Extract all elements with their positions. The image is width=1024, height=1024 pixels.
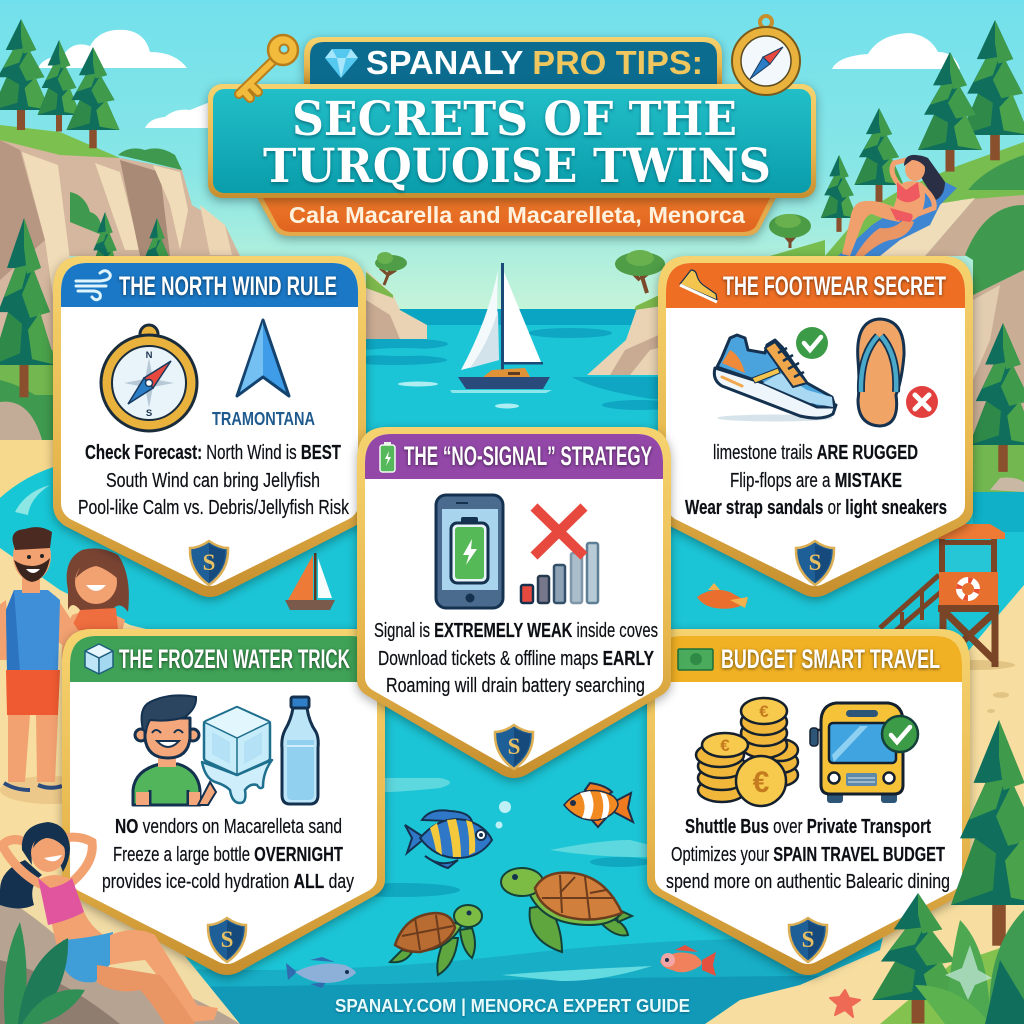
text block: Pool-like Calm vs. Debris/Jellyfish Risk <box>78 496 350 519</box>
icon: euro coins: € <box>759 702 769 721</box>
icon: wind <box>76 271 110 300</box>
right shore sand <box>705 585 1024 1024</box>
reclining woman on rock <box>0 822 240 1024</box>
lower left beach <box>0 880 240 1024</box>
text block: provides ice-cold hydration ALL day <box>102 870 355 893</box>
icon: water bottle <box>282 697 318 804</box>
text block <box>102 815 355 893</box>
fish: blue tropical <box>405 810 492 868</box>
lifeguard tower <box>880 524 1015 670</box>
text block: Check Forecast: North Wind is BEST <box>85 441 341 464</box>
left cliff and hill <box>0 125 240 540</box>
fish: grey <box>286 957 356 988</box>
fish: clownfish <box>564 783 633 827</box>
icon: battery <box>380 442 395 472</box>
icon: melting ice cube <box>202 707 272 803</box>
heading: THE NORTH WIND RULE <box>119 271 337 301</box>
icon: red cross <box>534 507 584 556</box>
text block <box>666 815 950 893</box>
icon: compass: S <box>146 408 152 419</box>
couple on the beach <box>0 527 129 804</box>
text block <box>78 441 350 519</box>
text block: Wear strap sandals or light sneakers <box>685 496 947 519</box>
heading: THE FROZEN WATER TRICK <box>119 644 350 674</box>
text block: Signal is EXTREMELY WEAK inside coves <box>374 619 658 642</box>
icon: shield <box>789 918 827 962</box>
background: sky <box>0 0 1024 310</box>
trees right <box>821 20 1024 472</box>
icon: compass: N <box>146 350 153 361</box>
icon: north arrow <box>237 320 289 396</box>
card: The Footwear Secret <box>658 256 973 597</box>
title line 2: TURQUOISE TWINS <box>263 139 771 194</box>
banner: orange subtitle <box>256 196 777 236</box>
rock and tree: right of sailboat <box>587 250 670 375</box>
card: The Frozen Water Trick <box>62 629 385 975</box>
icon: green check <box>882 716 918 752</box>
trees: bottom right <box>872 720 1024 1024</box>
icon: shield <box>495 725 533 769</box>
text block: Freeze a large bottle OVERNIGHT <box>113 843 343 866</box>
icon: shield <box>190 541 228 585</box>
text block: NO vendors on Macarelleta sand <box>115 815 342 838</box>
small sailboat <box>285 553 335 610</box>
icon: shuttle bus <box>810 703 903 803</box>
label: Tramontana: TRAMONTANA <box>212 409 315 429</box>
banner: main title <box>208 84 816 198</box>
card: Budget Smart Travel <box>647 629 970 975</box>
heading: Spanaly Pro Tips: SPANALY PRO TIPS: <box>366 44 703 81</box>
text block: limestone trails ARE RUGGED <box>713 441 918 464</box>
icon: smartphone <box>436 495 503 608</box>
icon: sneaker <box>714 335 836 422</box>
icon: key <box>239 35 298 98</box>
grass under round tree <box>770 240 825 256</box>
sand pebbles <box>987 692 1009 713</box>
icon: compass <box>101 325 197 431</box>
grass bottom right <box>880 940 1024 1024</box>
icon: shield <box>796 541 834 585</box>
cloud: left <box>38 30 215 128</box>
icon: shield <box>208 918 246 962</box>
text block: Flip-flops are a MISTAKE <box>730 469 902 492</box>
bubbles <box>496 801 511 828</box>
text block <box>374 619 658 697</box>
starfish <box>830 990 860 1017</box>
card: The No-Signal Strategy <box>357 427 671 778</box>
rock and tree: left of sailboat <box>366 252 427 339</box>
banner: top tab <box>304 37 722 86</box>
icon: red cross <box>906 386 938 418</box>
round tree by banner <box>769 214 811 248</box>
text block: spend more on authentic Balearic dining <box>666 870 950 893</box>
icon: euro coins: € <box>720 736 730 755</box>
cloud: right <box>832 33 960 69</box>
icon: smiling man <box>133 695 216 805</box>
heading: THE “NO-SIGNAL” STRATEGY <box>404 441 652 471</box>
icon: weak signal bars <box>521 543 598 603</box>
icon: euro coins <box>696 698 798 806</box>
right hill and cliff <box>825 142 1024 532</box>
sea turtle: small <box>390 905 482 975</box>
sailboat <box>450 263 552 393</box>
plant: bottom left <box>4 922 85 1024</box>
text block: Optimizes your SPAIN TRAVEL BUDGET <box>671 843 945 866</box>
sea turtle: large <box>501 868 632 952</box>
icon: ice cube <box>85 644 113 674</box>
plants: bottom right <box>915 910 1024 1024</box>
footer: SPANALY.COM | MENORCA EXPERT GUIDE <box>335 996 690 1016</box>
title banner <box>208 16 816 236</box>
fish: red <box>660 945 716 976</box>
subtitle: Cala Macarella and Macarelleta, Menorca <box>289 202 745 228</box>
orange swimmer fish <box>697 583 748 609</box>
title line 1: SECRETS OF THE <box>292 92 737 147</box>
icon: diamond <box>325 49 358 78</box>
left shore sand <box>0 548 190 910</box>
text block: Roaming will drain battery searching <box>386 674 645 697</box>
icon: flip-flop <box>858 319 904 426</box>
icon: shoe <box>680 270 717 302</box>
background: sea <box>0 309 1024 1024</box>
text block: Download tickets & offline maps EARLY <box>378 647 654 670</box>
card: The North Wind Rule <box>53 256 366 597</box>
trees left <box>0 19 171 397</box>
icon: green check <box>796 327 828 359</box>
text block: Shuttle Bus over Private Transport <box>685 815 931 838</box>
icon: banknote <box>678 649 713 670</box>
sunbather on towel <box>838 155 957 256</box>
icon: euro coins: € <box>753 766 770 799</box>
text block: South Wind can bring Jellyfish <box>106 469 320 492</box>
text block <box>685 441 947 519</box>
icon: compass <box>732 16 800 95</box>
